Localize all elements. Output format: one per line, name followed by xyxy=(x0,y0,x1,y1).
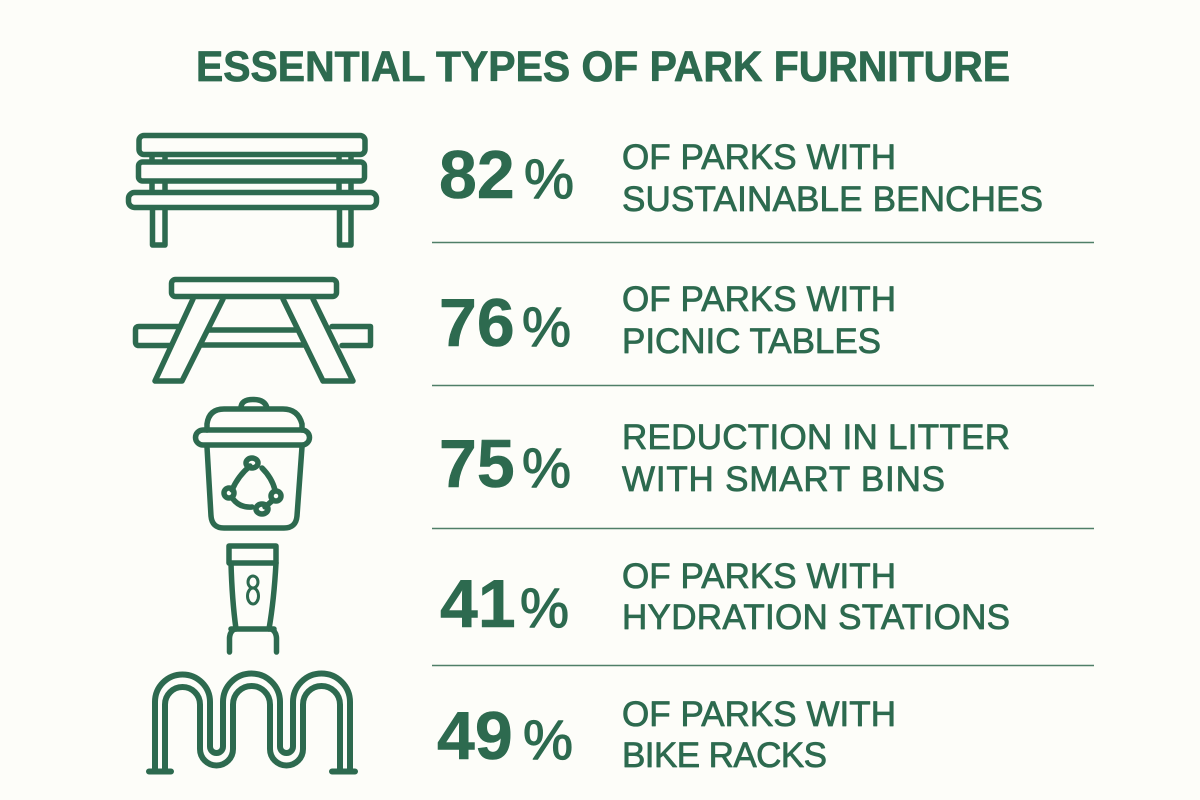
label: hydration stations: OF PARKS WITH xyxy=(622,557,896,596)
stat: 41%: 41 xyxy=(440,566,516,642)
icon: picnic table xyxy=(136,280,370,381)
label: bike racks: OF PARKS WITH xyxy=(622,695,896,734)
label: picnic tables: PICNIC TABLES xyxy=(622,322,881,361)
title: ESSENTIAL TYPES OF PARK FURNITURE xyxy=(196,43,1010,91)
label: smart bins: WITH SMART BINS xyxy=(622,460,945,499)
row: smart bins xyxy=(196,400,1010,528)
icon: bench xyxy=(128,136,376,245)
percent sign: % xyxy=(524,147,574,210)
stat: 76%: 76 xyxy=(439,285,515,361)
icon: bike rack xyxy=(149,674,355,772)
percent sign: % xyxy=(522,436,571,499)
label: sustainable benches: OF PARKS WITH xyxy=(622,138,896,177)
icon: recycling bin xyxy=(196,400,310,528)
label: hydration stations: HYDRATION STATIONS xyxy=(622,598,1010,637)
percent sign: % xyxy=(520,576,569,639)
icon: hydration station xyxy=(229,546,276,652)
label: bike racks: BIKE RACKS xyxy=(622,736,827,775)
row: hydration stations xyxy=(229,546,1010,652)
row: bike racks xyxy=(149,674,896,775)
label: smart bins: REDUCTION IN LITTER xyxy=(622,418,1010,457)
row: picnic tables xyxy=(136,280,896,381)
label: sustainable benches: SUSTAINABLE BENCHES xyxy=(622,180,1043,219)
percent sign: % xyxy=(522,295,571,358)
label: picnic tables: OF PARKS WITH xyxy=(622,280,896,319)
stat: 82%: 82 xyxy=(439,137,515,213)
stat: 75%: 75 xyxy=(439,426,515,502)
row: sustainable benches xyxy=(128,136,1043,245)
stat: 49%: 49 xyxy=(437,698,513,774)
percent sign: % xyxy=(523,708,573,771)
